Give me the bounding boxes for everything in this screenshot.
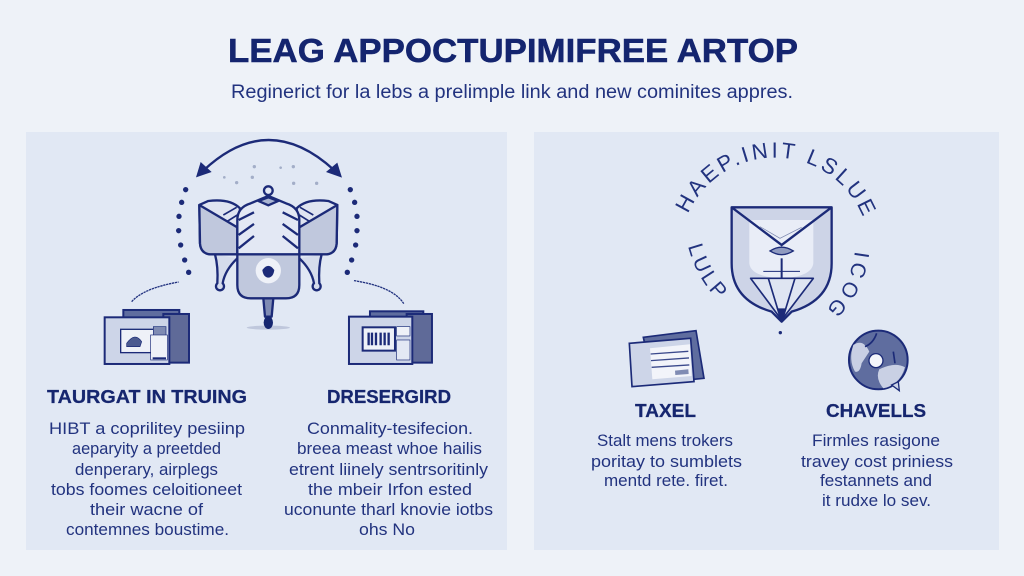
- icon: right folder: [349, 311, 432, 364]
- text block: left column: HIBT a coprilitey pesiinp: [49, 419, 245, 438]
- wings: [199, 200, 240, 254]
- text block: second column: uconunte tharl knovie iotbs: [284, 500, 493, 519]
- text block: fourth column: festannets and: [820, 471, 932, 490]
- text block: left column: denperary, airplegs: [75, 460, 218, 479]
- text block: left column: their wacne of: [90, 500, 203, 519]
- text block: second column: the mbeir Irfon ested: [308, 480, 472, 499]
- icon: globe: [849, 331, 908, 391]
- sparkle dots: [223, 165, 318, 185]
- panel: left: [26, 132, 507, 550]
- dotted arc right: [345, 187, 360, 275]
- emblem: [256, 258, 281, 283]
- text block: third column: [591, 431, 742, 490]
- heading: second column: DRESERGIRD: [327, 387, 451, 407]
- icon: shield: [732, 207, 832, 334]
- text block: third column: poritay to sumblets: [591, 452, 742, 471]
- text block: second column: ohs No: [359, 520, 415, 539]
- icon: left folder: [105, 310, 189, 364]
- text block: second column: breea meast whoe hailis: [297, 439, 482, 458]
- text block: left column: aeparyity a preetded: [72, 439, 221, 458]
- icon: document stack: [629, 331, 704, 387]
- rib lines: [239, 212, 298, 248]
- subtitle: Reginerict for la lebs a prelimple link and new cominites appres.: [231, 82, 793, 103]
- upper body: [237, 196, 299, 254]
- panel: right: [534, 132, 999, 550]
- text block: fourth column: [801, 431, 953, 510]
- text block: third column: mentd rete. firet.: [604, 471, 728, 490]
- heading: fourth column: CHAVELLS: [826, 401, 926, 421]
- text block: left column: [49, 419, 245, 539]
- circular label right: ICOG: [829, 252, 869, 316]
- text block: left column: contemnes boustime.: [66, 520, 229, 539]
- text block: second column: etrent liinely sentrsoritinly: [289, 460, 489, 479]
- text block: second column: [284, 419, 493, 539]
- foot and shadow: [247, 316, 290, 330]
- circular label left: LULP: [688, 244, 726, 294]
- title: LEAG APPOCTUPIMIFREE ARTOP: [228, 32, 798, 69]
- device: [199, 186, 337, 317]
- arrow: curved double arrow: [196, 140, 342, 178]
- text block: third column: Stalt mens trokers: [597, 431, 733, 450]
- dotted arc left: [176, 187, 191, 275]
- stem: [263, 298, 273, 317]
- illustration: winged device with arrows and folders: [105, 140, 432, 364]
- circular label top: HAEP.INIT LSLUE: [675, 142, 876, 216]
- lower body: [237, 254, 299, 298]
- text block: fourth column: Firmles rasigone: [812, 431, 940, 450]
- heading: left column: TAURGAT IN TRUING: [47, 387, 247, 407]
- text block: fourth column: travey cost priniess: [801, 452, 953, 471]
- text block: left column: tobs foomes celoitioneet: [51, 480, 242, 499]
- dashed connectors: [132, 281, 404, 304]
- text block: fourth column: it rudxe lo sev.: [822, 491, 931, 510]
- heading: third column: TAXEL: [635, 401, 696, 421]
- text block: second column: Conmality-tesifecion.: [307, 419, 473, 438]
- legs: [215, 254, 237, 290]
